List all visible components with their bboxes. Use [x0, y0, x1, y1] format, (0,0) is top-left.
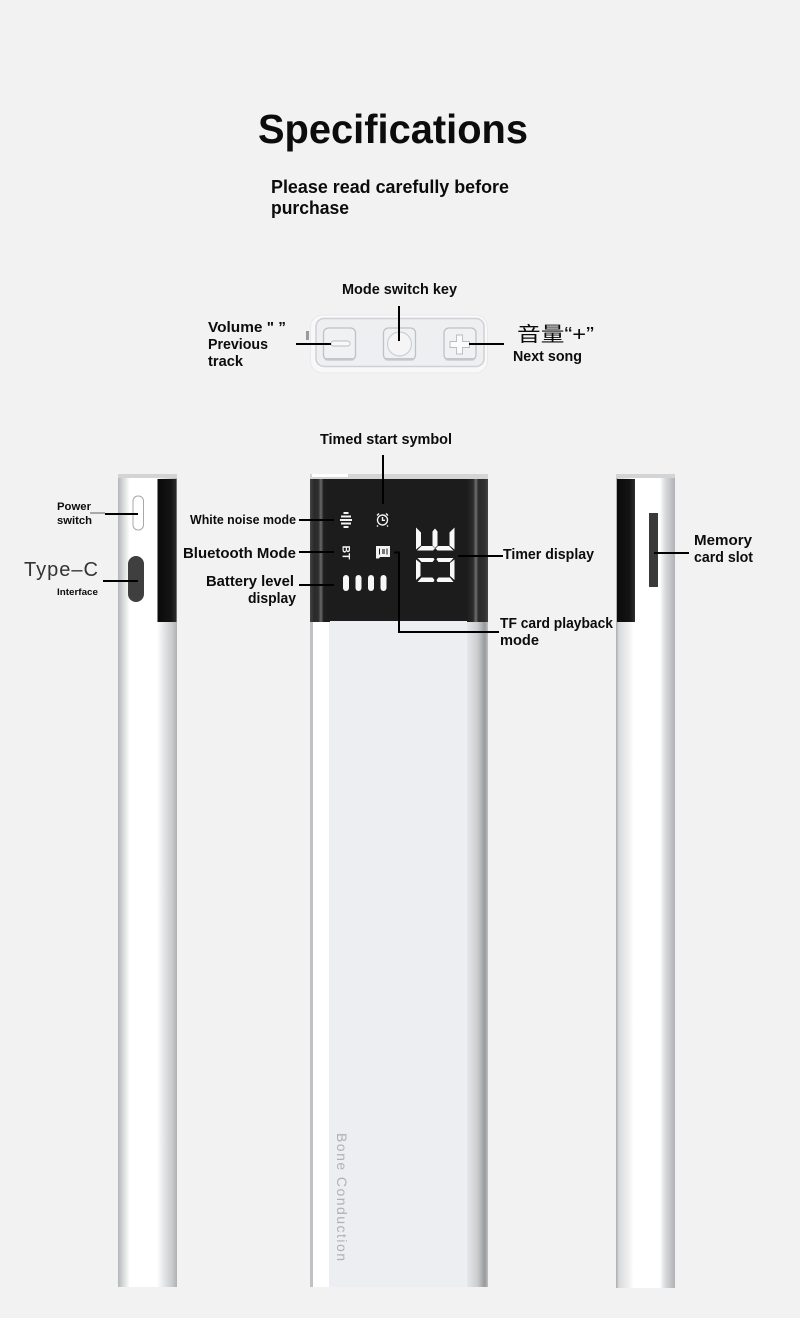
arrow: volume plus [469, 343, 504, 345]
digit zero [416, 558, 454, 582]
arrow: bluetooth [299, 551, 334, 553]
arrow: white noise [299, 519, 334, 521]
label: battery level display [206, 573, 297, 607]
icon: white noise [340, 512, 352, 528]
timer digits [416, 528, 454, 582]
label: battery level display: Battery level [206, 573, 294, 590]
arrow: power switch [90, 512, 138, 515]
label: power switch: Power [57, 501, 92, 513]
digit three [416, 528, 454, 550]
panel: center front view [310, 474, 488, 1287]
label: volume plus: 音量“+” [517, 323, 594, 346]
panel: button module [306, 315, 488, 373]
label: tf card playback mode [500, 615, 614, 649]
icon: mode key [384, 328, 416, 360]
label: battery level display: display [248, 590, 297, 607]
arrow: type-c [103, 580, 138, 582]
label: white noise mode: White noise mode [190, 512, 296, 527]
label: volume minus [208, 319, 286, 370]
label: power switch [57, 501, 92, 527]
module body [310, 315, 488, 373]
label: memory card slot: Memory [694, 532, 753, 549]
icon: alarm clock [377, 514, 388, 526]
icon: battery level [343, 575, 386, 591]
product marking: Bone Conduction [334, 1133, 350, 1261]
title: Specifications [258, 106, 528, 152]
label: memory card slot [694, 532, 753, 566]
subtitle: Please read carefully before [271, 176, 509, 197]
icon: power switch [133, 496, 144, 530]
arrow: timed start [382, 455, 384, 504]
label: tf card playback mode: TF card playback [500, 615, 614, 632]
label: volume minus: Volume " ” [208, 319, 286, 336]
icon: TF card [376, 546, 390, 558]
arrow: volume minus [296, 343, 331, 345]
device body [310, 474, 488, 1287]
label: volume plus: Next song [513, 348, 582, 365]
label: interface: Interface [57, 587, 98, 598]
arrow: timer display [458, 555, 503, 557]
memory card slot [649, 513, 658, 587]
label: power switch: switch [57, 515, 92, 527]
black strip [617, 479, 635, 622]
arrow: mode switch key [398, 306, 400, 341]
label: memory card slot: card slot [694, 549, 753, 566]
icon: BT: BT [340, 546, 352, 560]
icon: plus key [444, 328, 476, 360]
arrow: tf card [394, 552, 499, 632]
label: tf card playback mode: mode [500, 632, 539, 649]
label: bluetooth mode: Bluetooth Mode [183, 545, 296, 562]
arrow: battery level [299, 584, 334, 586]
subtitle [271, 176, 509, 218]
heading: mode switch key: Mode switch key [342, 281, 458, 298]
display panel [310, 479, 488, 622]
icon: minus key [324, 328, 356, 360]
arrow: memory card slot [654, 552, 689, 554]
label: volume minus: track [208, 353, 244, 370]
panel: left side view [118, 474, 177, 1287]
black strip [158, 479, 176, 622]
icon: type-c port [128, 556, 144, 602]
label: type-c: Type–C [24, 559, 99, 581]
panel: right side view [616, 474, 675, 1288]
label: volume minus: Previous [208, 336, 268, 353]
label: timer display: Timer display [503, 546, 595, 563]
label: timed start symbol: Timed start symbol [320, 432, 452, 448]
subtitle: purchase [271, 197, 349, 218]
label: volume plus [513, 323, 594, 365]
